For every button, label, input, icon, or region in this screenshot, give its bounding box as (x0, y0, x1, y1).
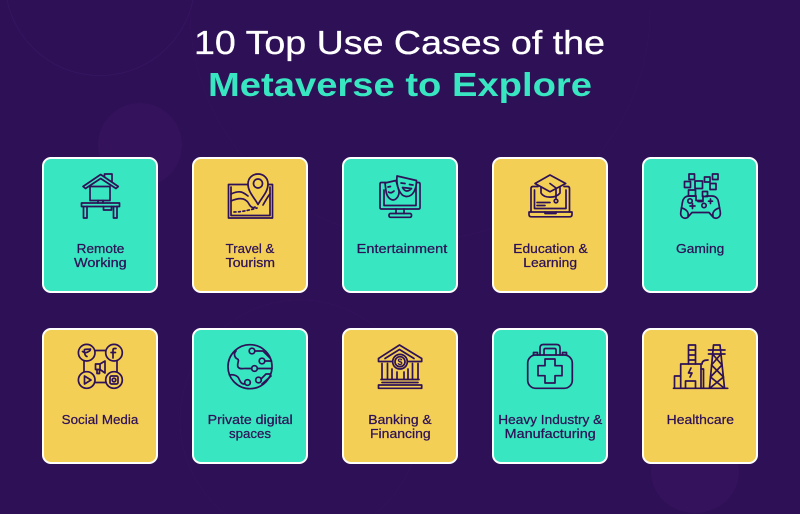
label: Tourism (226, 256, 275, 270)
label: Healthcare (667, 413, 734, 427)
label (226, 242, 275, 270)
panel: social media (43, 329, 157, 463)
label: Heavy Industry & (498, 413, 603, 427)
label: Travel & (226, 242, 275, 256)
panel: healthcare (643, 329, 757, 463)
label (368, 413, 432, 441)
title (194, 25, 605, 104)
label (74, 242, 127, 270)
icon: graduation cap on laptop (529, 175, 572, 217)
panel: private digital spaces (193, 329, 307, 463)
icon: first aid kit (528, 344, 572, 388)
icon: game controller with pixels (681, 174, 720, 218)
label: Learning (523, 256, 577, 270)
label: spaces (229, 427, 271, 441)
title line 2: Metaverse to Explore (208, 67, 592, 104)
label: Financing (370, 427, 431, 441)
label: Social Media (62, 413, 138, 427)
panel: entertainment (343, 158, 457, 292)
label: Manufacturing (505, 427, 596, 441)
panel: remote working (43, 158, 157, 292)
panel: gaming (643, 158, 757, 292)
label: Entertainment (357, 242, 448, 256)
icon: digital globe (228, 345, 272, 389)
label: Banking & (368, 413, 432, 427)
panel: travel and tourism (193, 158, 307, 292)
icon: power plant and pylon (674, 345, 728, 388)
label (208, 413, 293, 441)
icon: social network megaphone (78, 344, 122, 388)
label: Working (74, 256, 127, 270)
icon: bank building: $ (397, 357, 403, 367)
label: Education & (513, 242, 588, 256)
icon: theatre masks on monitor (380, 176, 420, 217)
label (513, 242, 588, 270)
icon: map with pin (228, 174, 272, 218)
label: Remote (77, 242, 124, 256)
panel: education and learning (493, 158, 607, 292)
label (498, 413, 603, 441)
label: Gaming (676, 242, 724, 256)
icon: home office (82, 174, 120, 218)
panel: heavy industry and manufacturing (493, 329, 607, 463)
title line 1: 10 Top Use Cases of the (194, 25, 605, 62)
panel: banking and financing (343, 329, 457, 463)
label: Private digital (208, 413, 293, 427)
